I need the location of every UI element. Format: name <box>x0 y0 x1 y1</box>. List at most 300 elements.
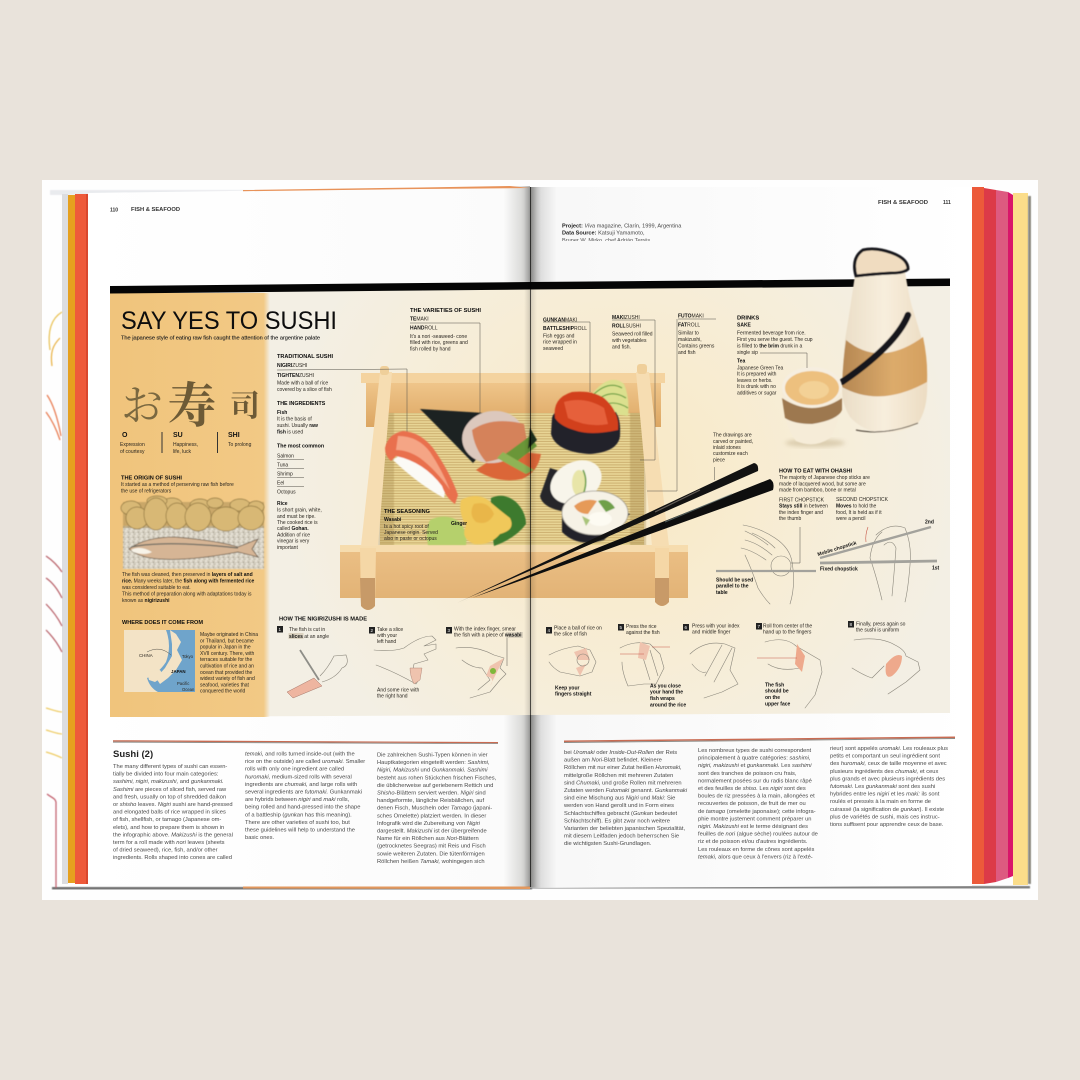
traditional sushi column: covered by a slice of fish <box>277 387 332 393</box>
varieties: maki: MAKIZUSHI <box>612 315 640 321</box>
how to eat with ohashi: HOW TO EAT WITH OHASHI <box>779 468 853 474</box>
step 8 <box>848 621 920 694</box>
traditional sushi column: and must be ripe. <box>277 514 316 520</box>
body text column 6: plus grands et avec plusieurs ingrédients des <box>830 776 945 782</box>
page headers <box>110 200 951 214</box>
body text column 3: dargestellt. Makizushi ist der übergreifende <box>377 828 487 834</box>
body text column 3: Shisho-Blättern serviert werden. Nigiri sind <box>377 790 486 796</box>
map of Japan: JAPAN <box>171 669 186 674</box>
traditional sushi column: Eel <box>277 480 284 486</box>
chopstick labels: table <box>716 590 728 596</box>
varieties: temaki: HANDROLL <box>410 326 438 332</box>
title: SAY YES TO SUSHI <box>121 307 337 335</box>
body text column 3: handgeformte, längliche Reisbällchen, auf <box>377 798 484 804</box>
step 3: 3 <box>448 628 450 633</box>
how nigirizushi is made heading: HOW THE NIGIRIZUSHI IS MADE <box>279 616 367 622</box>
chopstick labels: 2nd <box>925 520 934 526</box>
syllable meanings: O <box>122 432 128 439</box>
step 3 <box>446 626 523 698</box>
body text column 2: basic ones. <box>245 835 274 841</box>
varieties: maki: Seaweed roll filled <box>612 332 653 338</box>
text: seasoning <box>384 509 467 542</box>
body text column 1 <box>113 764 233 861</box>
body text column 1: of fish, shellfish, or tamago (Japanese om- <box>113 817 221 823</box>
varieties: futomaki: Contains greens <box>678 344 715 350</box>
body text column 6: plusieurs ingrédients des chumaki, et ceux <box>830 769 938 775</box>
step 2: And some rice with <box>377 688 419 694</box>
chopstick labels: Should be used <box>716 578 753 584</box>
kanji calligraphy: 寿 <box>168 367 216 436</box>
fish caption: known as nigirizushi <box>122 598 170 604</box>
drinks: It is drunk with no <box>737 384 776 390</box>
drinks: Fermented beverage from rice. <box>737 330 806 336</box>
sake cup <box>782 367 842 444</box>
chopstick note: carved or painted, <box>713 439 753 445</box>
drinks: It is prepared with <box>737 372 777 378</box>
step 6: 6 <box>684 625 688 630</box>
varieties: temaki: fish rolled by hand <box>410 346 451 352</box>
body text column 5: feuilles de nori (algue sèche) roulées autour de <box>698 832 818 838</box>
how to eat with ohashi: made from bamboo, bone or metal <box>779 488 856 494</box>
traditional sushi column: sushi. Usually raw <box>277 423 318 429</box>
chopstick note: piece <box>713 458 725 464</box>
body text column 1: and fresh, usually on top of shredded daikon <box>113 794 226 800</box>
step 7: Roll from center of the <box>763 624 812 630</box>
body text column 2: temaki, and rolls turned inside-out (with the <box>245 752 355 758</box>
sushi: nigiri <box>385 431 458 504</box>
varieties: gunkan: rice wrapped in <box>543 340 577 346</box>
varieties: futomaki: makizushi, <box>678 337 702 343</box>
drinks: additives or sugar <box>737 390 777 396</box>
traditional sushi column: The most common <box>277 444 324 450</box>
where it comes from text: or Thailand, but became <box>200 638 254 644</box>
step 4: fingers straight <box>555 692 592 698</box>
origin of sushi: It started as a method of perserving raw fish before <box>121 482 234 488</box>
syllable meanings: SU <box>173 432 183 439</box>
fish caption: rice. Many weeks later, the fish along with fermented rice <box>122 578 255 584</box>
step 5: around the rice <box>650 702 686 708</box>
syllable meanings: SHI <box>228 432 240 439</box>
syllable meanings: life, luck <box>173 449 192 455</box>
kanji calligraphy: お <box>121 373 163 433</box>
section heading: Sushi (2) <box>113 749 153 760</box>
varieties: gunkan: seaweed <box>543 346 563 352</box>
seasoning: wasabi and ginger <box>427 496 526 546</box>
step 4: Keep your <box>555 686 580 692</box>
how to eat with ohashi: FIRST CHOPSTICK <box>779 498 825 504</box>
body text column 5: normalement posées sur du radis blanc râpé <box>698 778 812 784</box>
body text column 1: The many different types of sushi can essen- <box>113 764 227 770</box>
drinks: DRINKS <box>737 316 759 322</box>
how to eat with ohashi: SECOND CHOPSTICK <box>836 497 889 503</box>
body text column 5: Les rouleaux en forme de cônes sont appelés <box>698 847 814 853</box>
body text column 5: riz et de poisson et/ou d'autres ingrédients. <box>698 839 808 845</box>
how to eat with ohashi: Moves to hold the <box>836 504 877 510</box>
body text column 4: Röllchen mit nur einer Zutat heißen Huromaki, <box>564 765 682 771</box>
body text column 5: de tamago (omelette japonaise); cette infogra- <box>698 809 816 815</box>
traditional sushi column <box>277 354 334 551</box>
step 4: the slice of fish <box>554 632 587 638</box>
text: seasoning: Ginger <box>451 521 467 527</box>
step 7 <box>756 623 822 708</box>
kanji calligraphy <box>121 367 260 436</box>
where it comes from text: Maybe originated in China <box>200 632 258 638</box>
map of Japan: CHINA <box>139 653 153 658</box>
traditional sushi column: Shrimp <box>277 472 293 478</box>
map of Japan: Ocean <box>182 687 195 692</box>
left page <box>88 186 530 889</box>
body text column 1: ingredients. Rolls shaped into cones are called <box>113 855 232 861</box>
body text column 2: rice on the outside) are called uromaki. Smaller <box>245 759 365 765</box>
varieties: futomaki: and fish <box>678 350 696 356</box>
body text column 5: phie montre justement comment préparer un <box>698 816 811 822</box>
body text column 6: petits et comportant un seul ingrédient sont <box>830 754 940 760</box>
traditional sushi column: important <box>277 545 298 551</box>
origin of sushi <box>121 476 234 494</box>
body text column 6: cuirassé (la signification de gunkan). Il existe <box>830 807 944 813</box>
step 7: 7 <box>758 624 760 629</box>
where it comes from text: conquered the world <box>200 689 246 695</box>
project credits: Bruner W. Mirko, chef Adrián Terrés <box>562 238 650 244</box>
drinks: SAKE <box>737 322 752 328</box>
project credits: Project: Viva magazine, Clarín, 1999, Argentina <box>562 224 682 230</box>
fish caption: was considered suitable to eat. <box>122 585 191 591</box>
body text column 5: principalement à quatre catégories: sashimi, <box>698 756 811 762</box>
body text column 1: elets), and how to prepare them is shown in <box>113 825 224 831</box>
fish caption: This method of preparation along with adaptations today is <box>122 592 252 598</box>
map of Japan: Tokyo <box>182 654 194 659</box>
body text column 2 <box>245 752 365 841</box>
varieties: temaki: filled with rice, greens and <box>410 340 468 346</box>
traditional sushi column: THE INGREDIENTS <box>277 401 326 407</box>
body text column 4: mit diesem Leitfaden jedoch beherrschen Sie <box>564 834 679 840</box>
sake pitcher and cup <box>782 249 927 447</box>
where it comes from text: widest variety of fish and <box>200 676 255 682</box>
where it comes from text: popular in Japan in the <box>200 645 251 651</box>
varieties: gunkan: BATTLESHIPROLL <box>543 326 587 332</box>
chopstick labels: parallel to the <box>716 584 749 590</box>
body text column 3: denen Fisch, Muscheln oder Tamago (japani- <box>377 806 492 812</box>
chopstick labels <box>716 520 940 596</box>
page headers: 111 <box>943 200 951 206</box>
body text column 6: plus de variétés de sushi, mais ces instruc- <box>830 814 940 820</box>
page headers: FISH & SEAFOOD <box>878 200 928 206</box>
body text column 6: roulés et pressés à la main en forme de <box>830 799 931 805</box>
body text column 1: tially be divided into four main categories: <box>113 772 219 778</box>
fish caption <box>122 572 255 604</box>
subtitle: The japanese style of eating raw fish caught the attention of the argentine palate <box>121 336 320 342</box>
page headers: FISH & SEAFOOD <box>131 207 180 213</box>
how to eat with ohashi: The majority of Japanese chop sticks are <box>779 475 870 481</box>
step 7: upper face <box>765 701 791 707</box>
drinks: single sip <box>737 350 758 356</box>
right page <box>530 187 972 888</box>
traditional sushi column: Addition of rice <box>277 532 310 538</box>
body text column 3: Infografik wird die Zubereitung von Nigiri <box>377 821 481 827</box>
step 5: your hand the <box>650 690 683 696</box>
text: seasoning: THE SEASONING <box>384 509 430 515</box>
page headers: 110 <box>110 208 118 214</box>
where it comes from heading: WHERE DOES IT COME FROM <box>122 620 204 626</box>
body text column 5: boules de riz pressées à la main, allongées et <box>698 794 815 800</box>
varieties: temaki: THE VARIETIES OF SUSHI <box>410 308 482 314</box>
traditional sushi column: The cooked rice is <box>277 520 318 526</box>
step 2 <box>369 627 436 700</box>
drinks: Japanese Green Tea <box>737 366 784 372</box>
body text column 2: ingredients are chumaki, and large rolls with <box>245 782 357 788</box>
chopstick labels: Mobile chopstick <box>817 540 858 558</box>
body text column 6: rieur) sont appelés uromaki. Les rouleaux plus <box>830 746 948 752</box>
body text column 1: the infographic above. Makizushi is the general <box>113 832 233 838</box>
step 5: 5 <box>620 625 622 630</box>
body text column 4: Zutaten werden Futomaki genannt. Gunkanmaki <box>564 788 688 794</box>
body text column 4: Varianten der beliebten japanischen Spezialität, <box>564 826 685 832</box>
body text column 1: and elongated balls of rice wrapped in slices <box>113 810 226 816</box>
sushi: gunkan with roe and cucumber <box>551 380 628 454</box>
traditional sushi column: Rice <box>277 501 288 507</box>
step 5: As you close <box>650 684 681 690</box>
drinks: Tea <box>737 358 745 364</box>
how to eat with ohashi <box>779 468 889 522</box>
traditional sushi column: vinegar is very <box>277 539 310 545</box>
body text column 2: several ingredients are futomaki. Gunkanmaki <box>245 790 362 796</box>
step 7: The fish <box>765 682 784 688</box>
chopstick labels: Fixed chopstick <box>820 566 858 572</box>
body text column 1: of dried seaweed), rice, fish, and/or other <box>113 848 218 854</box>
body text column 5 <box>698 748 818 860</box>
body text column 6: des huromaki, ceux de taille moyenne et avec <box>830 761 947 767</box>
step 8: the sushi is uniform <box>856 628 899 634</box>
body text column 3: (getrocknetes Seegras) mit Reis und Fisch <box>377 844 486 850</box>
body text column 1: sashimi, nigiri, makizushi, and gunkanmaki. <box>113 779 224 785</box>
traditional sushi column: TRADITIONAL SUSHI <box>277 354 334 360</box>
body text column 1: term for a roll made with nori leaves (sheets <box>113 840 225 846</box>
fish caption: The fish was cleaned, then preserved in layers of salt and <box>122 572 253 578</box>
how to eat with ohashi: Stays still in between <box>779 504 828 510</box>
where it comes from text: XVII century. There, with <box>200 651 255 657</box>
drinks: leaves or herbs. <box>737 378 773 384</box>
rule: right page text <box>564 736 955 743</box>
how to eat with ohashi: the index finger and <box>779 510 823 516</box>
drinks <box>737 316 813 396</box>
step 6: and middle finger <box>692 630 731 636</box>
varieties: maki: with vegetables <box>612 338 647 344</box>
sushi: temaki hand roll <box>420 406 541 480</box>
varieties: futomaki: Similar to <box>678 330 699 336</box>
body text column 4: werden von Hand gerollt und in Form eines <box>563 803 674 809</box>
body text column 4: Schlachtschiff). Es gibt zwar noch weitere <box>564 818 670 824</box>
step 5 <box>618 624 686 708</box>
chopsticks <box>457 463 774 604</box>
body text column 3: sowie weiteren Zutaten. Die tütenförmigen <box>377 851 485 857</box>
body text column 4: bei Uromaki oder Inside-Out-Rollen der Reis <box>564 750 677 756</box>
body text column 2: are hybrids between nigiri and maki rolls, <box>245 797 350 803</box>
cup shadow <box>785 439 845 447</box>
traditional sushi column: Fish <box>277 410 287 416</box>
step 1: The fish is cut in <box>289 627 325 633</box>
illustration: first chopstick hand <box>716 525 816 604</box>
varieties: maki <box>612 315 653 350</box>
body text column 6: hybrides entre les nigiri et les maki: ils sont <box>830 792 940 798</box>
how to eat with ohashi: made of lacquered wood, but some are <box>779 481 866 487</box>
step 8: 8 <box>850 622 852 627</box>
step 6: Press with your index <box>692 624 740 630</box>
body text column 1: or shisho leaves. Nigiri sushi are hand-pressed <box>113 802 233 808</box>
body text column 3: Röllchen heißen Tamaki, wohingegen sich <box>377 859 485 865</box>
body text column 3: Die zahlreichen Sushi-Typen können in vier <box>377 752 488 758</box>
kanji calligraphy: 司 <box>230 381 260 425</box>
body text column 2: these guidelines will help to understand the <box>245 828 355 834</box>
step 5: Press the rice <box>626 624 657 630</box>
body text column 5: et des feuilles de shiso. Les nigiri sont des <box>698 786 806 792</box>
body text column 4: die wichtigsten Sushi-Grundlagen. <box>564 841 652 847</box>
traditional sushi column: Tuna <box>277 462 288 468</box>
leader lines over tray <box>277 319 716 491</box>
step 2: the right hand <box>377 694 408 700</box>
sushi: maki rolls <box>540 452 630 543</box>
step 5: fish wraps <box>650 696 675 702</box>
book edge with decorative arcs <box>46 312 62 888</box>
text: seasoning: Is a hot spicy root of <box>384 524 429 530</box>
step 1: 1 <box>278 627 282 632</box>
traditional sushi column: TIGHTENZUSHI <box>277 373 314 379</box>
body text column 3 <box>377 752 497 865</box>
rule: left page text <box>113 740 498 744</box>
project credits <box>562 224 682 241</box>
syllable meanings: To prolong <box>228 442 252 448</box>
pitcher <box>842 249 927 433</box>
body text column 6: futomaki. Les gunkanmaki sont des sushi <box>830 784 935 790</box>
varieties: gunkan: GUNKANMAKI <box>543 318 577 324</box>
body text column 1: Sashimi are pieces of sliced fish, served raw <box>113 787 227 793</box>
body text column 3: sches Omelette) platziert werden. In dieser <box>377 813 486 819</box>
gutter shadow <box>524 187 537 887</box>
varieties: maki: ROLLSUSHI <box>612 324 641 330</box>
body text column 2: being rolled and hand-pressed into the shape <box>245 805 360 811</box>
body text column 3: Name für ein Röllchen aus Nori-Blättern <box>377 836 479 842</box>
varieties: futomaki: FATROLL <box>678 322 700 328</box>
how to eat with ohashi: the thumb <box>779 516 801 522</box>
syllable meanings <box>120 432 252 455</box>
step 2: with your <box>377 633 397 639</box>
syllable meanings: Happiness, <box>173 442 198 448</box>
varieties: temaki: It's a nori -seaweed- cone <box>410 334 467 340</box>
step 1: slices at an angle <box>289 634 329 640</box>
black header bar <box>110 278 950 294</box>
step 3: the fish with a piece of wasabi <box>454 632 522 638</box>
traditional sushi column: called Gohan. <box>277 526 309 532</box>
body text column 3: besteht aus rohen Stückchen frischen Fisches, <box>377 775 497 781</box>
step 4: 4 <box>548 628 550 633</box>
drinks: is filled to the brim drunk in a <box>737 344 803 350</box>
body text column 3: Hauptkategorien eingeteilt werden: Sashimi, <box>377 760 490 766</box>
chopstick note: inlaid stones <box>713 445 741 451</box>
varieties: futomaki: FUTOMAKI <box>678 314 704 320</box>
step 6 <box>683 624 740 698</box>
chopstick note: customize each <box>713 451 748 457</box>
text: seasoning: also in paste or octopus <box>384 536 437 542</box>
chopstick note <box>713 432 753 480</box>
varieties: maki: and fish. <box>612 344 631 350</box>
syllable meanings: Expression <box>120 442 145 448</box>
right page edges and colour strips <box>530 187 1031 888</box>
body text column 4: außen am Nori-Blatt befindet. Kleinere <box>564 758 662 764</box>
map of Japan: Pacific <box>177 681 189 686</box>
body text column 6: tions suffisent pour apprendre ceux de base. <box>830 822 944 828</box>
varieties: temaki <box>410 308 482 352</box>
where it comes from text <box>200 632 258 695</box>
origin of sushi: the use of refrigerators <box>121 488 172 494</box>
text: seasoning: Japanese origin. Served <box>384 530 438 536</box>
syllable meanings: of courtesy <box>120 449 145 455</box>
body text column 4: mittelgroße Röllchen mit mehreren Zutaten <box>564 773 673 779</box>
where it comes from text: cultivation of rice and an <box>200 664 254 670</box>
traditional sushi column: Salmon <box>277 454 294 460</box>
varieties: gunkan <box>543 318 587 352</box>
step 4: Place a ball of rice on <box>554 626 602 632</box>
project credits: Data Source: Katsuji Yamamoto, <box>562 230 645 236</box>
text: seasoning: Wasabi <box>384 517 402 523</box>
infographic background <box>110 286 950 717</box>
body text column 5: recouvertes de poisson, de fruit de mer ou <box>698 801 806 807</box>
step 1 <box>277 626 347 698</box>
step 4 <box>546 626 602 698</box>
traditional sushi column: NIGIRIZUSHI <box>277 363 307 369</box>
body text column 3: Nigiri, Makizushi und Gunkanmaki. Sashimi <box>377 768 488 774</box>
step 7: hand up to the fingers <box>763 630 812 636</box>
traditional sushi column: Octopus <box>277 490 296 496</box>
step 8: Finally, press again so <box>856 622 906 628</box>
traditional sushi column: Is short grain, white, <box>277 508 322 514</box>
body text column 4: sind eine Mischung aus Nigiri und Maki: Sie <box>564 796 675 802</box>
body text column 4: sind Chumaki, und große Rollen mit mehreren <box>564 780 682 786</box>
body text column 2: rolls with only one ingredient are called <box>245 767 344 773</box>
how to eat with ohashi: food, It is held as if it <box>836 510 882 516</box>
where it comes from text: ocean that provided the <box>200 670 252 676</box>
body text column 2: There are other varieties of sushi too, but <box>245 820 350 826</box>
body text column 2: huromaki, medium-sized rolls with several <box>245 774 352 780</box>
white photo frame <box>42 180 1038 900</box>
body text column 6 <box>830 746 948 828</box>
step 2: Take a slice <box>377 627 403 633</box>
chopstick labels: 1st <box>932 566 940 572</box>
where it comes from text: seafood, varieties that <box>200 682 250 688</box>
body text column 5: Les nombreux types de sushi correspondent <box>698 748 812 754</box>
step 2: left hand <box>377 639 396 645</box>
chopstick note: The drawings are <box>713 432 752 438</box>
varieties: temaki: TEMAKI <box>410 316 429 322</box>
body text column 4: Schlachtschiffes gebracht (Gunkan bedeutet <box>564 811 677 817</box>
bamboo sushi tray <box>340 364 688 610</box>
body text column 5: nigiri. Makizushi est le terme désignant des <box>698 824 808 830</box>
where it comes from text: terraces suitable for the <box>200 657 252 663</box>
body text column 2: of a battleship (gunkan has this meaning). <box>245 812 352 818</box>
map of Japan <box>124 630 195 692</box>
traditional sushi column: fish is used <box>277 430 303 436</box>
traditional sushi column: Made with a ball of rice <box>277 380 328 386</box>
body text column 5: sont des tranches de poisson cru frais, <box>698 771 797 777</box>
step 3: With the index finger, smear <box>454 626 516 632</box>
body text column 4 <box>563 750 688 847</box>
body text column 5: temaki, alors que ceux à l'envers (riz à l'exté- <box>698 854 813 860</box>
varieties: futomaki <box>678 314 715 356</box>
illustration: fish in salt under stones <box>121 496 264 569</box>
illustration: second chopstick hand <box>820 526 937 602</box>
drinks: First you serve the guest. The cup <box>737 337 813 343</box>
step 2: 2 <box>370 628 374 633</box>
step 7: should be <box>765 689 789 695</box>
step 7: on the <box>765 695 780 701</box>
